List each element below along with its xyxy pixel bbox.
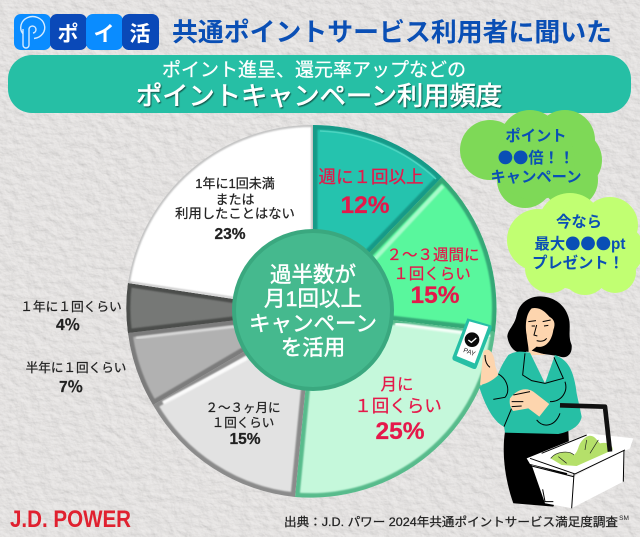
facial features <box>528 320 551 341</box>
basket handle <box>560 405 610 452</box>
label: yearly: １年に１回くらい <box>20 300 122 314</box>
skirt <box>504 430 570 507</box>
label: monthly: 25% <box>375 418 425 445</box>
label: 2-3 months: １回くらい <box>212 416 274 430</box>
label: less than yearly: 1年に1回未満 <box>195 176 275 191</box>
callout: present: プレゼント！ <box>532 254 624 272</box>
callout: point multiplier: キャンペーン <box>490 169 582 186</box>
callout: point multiplier: ポイント <box>505 128 567 145</box>
icon: P mark <box>21 17 45 48</box>
logo: ポイ活 badge: ポ <box>58 23 78 46</box>
logo: ポイ活 badge: 活 <box>130 23 150 46</box>
logo: ポイ活 badge: イ <box>94 23 114 46</box>
banner subtitle: ポイント進呈、還元率アップなどの <box>162 59 466 81</box>
label: 2-3 weeks <box>386 246 480 309</box>
label: half-year <box>26 361 126 396</box>
slice: yearly 4% <box>126 283 233 333</box>
vegetables <box>551 436 613 466</box>
label: weekly <box>318 167 424 219</box>
slice: 2-3 weeks 15% <box>370 177 496 332</box>
torso and arms <box>479 352 582 434</box>
label: monthly: 月に <box>380 376 414 394</box>
label: 2-3 weeks: ２～３週間に <box>386 246 480 264</box>
center text: を活用 <box>281 336 345 360</box>
banner heading: ポイントキャンペーン利用頻度 <box>136 81 502 111</box>
label: yearly: 4％ <box>56 317 80 334</box>
label: yearly <box>20 300 122 334</box>
label: 2-3 weeks: 15% <box>410 282 460 309</box>
hair <box>507 296 572 357</box>
callout: point multiplier: ●●倍！！ <box>498 146 574 168</box>
label: less than yearly: または <box>215 192 255 207</box>
center text: 過半数が <box>270 263 356 287</box>
label: half-year: 7％ <box>59 379 83 396</box>
callout: present: 今なら <box>556 213 602 231</box>
slice: 2-3 months 15% <box>153 352 306 497</box>
label: 2-3 months: ２～３ヶ月に <box>205 401 281 415</box>
label: less than yearly: 23% <box>214 226 246 243</box>
center text: 月1回以上 <box>264 287 362 311</box>
slice: half-year 7% <box>128 320 244 405</box>
callout: point multiplier <box>460 110 602 208</box>
title: 共通ポイントサービス利用者に聞いた <box>172 18 612 47</box>
label: 2-3 weeks: １回くらい <box>393 266 471 283</box>
basket rim back <box>527 433 633 475</box>
face <box>526 308 555 355</box>
center circle <box>234 231 392 389</box>
label: less than yearly: 利用したことはない <box>175 206 295 221</box>
label: less than yearly <box>175 176 295 243</box>
callout: present: 最大●●●pt <box>535 232 625 254</box>
slice: monthly 25% <box>295 311 495 498</box>
pie chart <box>126 125 496 498</box>
label: 2-3 months <box>205 401 281 448</box>
hand and forearm <box>480 350 498 385</box>
source superscript: SM <box>619 515 629 522</box>
basket body <box>532 450 625 508</box>
label: half-year: 半年に１回くらい <box>26 361 126 375</box>
logo: J.D. POWER: J.D. POWER <box>10 506 131 533</box>
center text <box>249 263 377 360</box>
phone <box>452 318 492 369</box>
logo: ポイ活 badge <box>14 14 159 50</box>
label: 2-3 months: 15% <box>229 431 261 448</box>
slice: weekly 12% <box>313 125 442 252</box>
phone label: PAY <box>462 347 477 358</box>
banner <box>8 55 631 113</box>
label: weekly: 12% <box>340 192 390 219</box>
slice: less than yearly 23% <box>128 125 313 311</box>
source note: 出典：J.D. パワー 2024年共通ポイントサービス満足度調査 <box>284 515 618 529</box>
label: monthly: １回くらい <box>354 396 442 416</box>
label: monthly <box>354 376 442 445</box>
label: weekly: 週に１回以上 <box>318 167 424 187</box>
basket lines <box>530 435 625 508</box>
callout: present <box>507 193 640 295</box>
center text: キャンペーン <box>249 312 377 336</box>
illustration: woman with phone and basket <box>452 296 633 508</box>
